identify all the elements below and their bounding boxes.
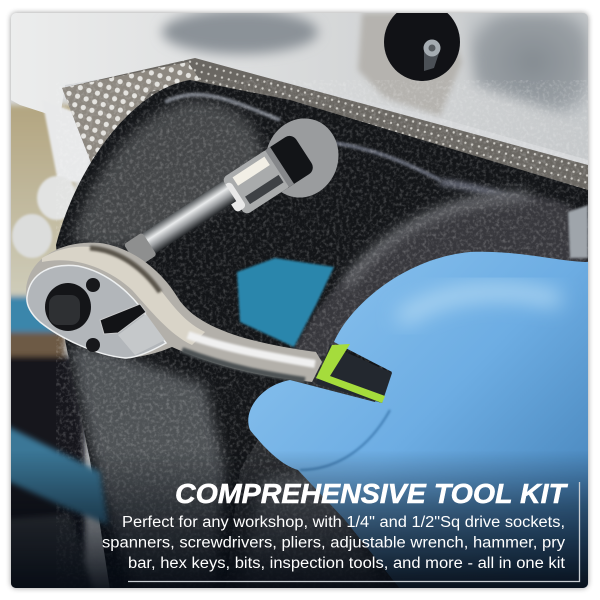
left blurred background (11, 102, 90, 588)
square drive (45, 283, 91, 331)
left white lugs (12, 100, 92, 258)
right bolt (568, 205, 588, 258)
ratchet head and handle (26, 243, 322, 382)
engine head: pale casting (11, 13, 588, 160)
screws (86, 278, 100, 292)
description text: spanners, screwdrivers, pliers, adjustable wrench, hammer, pry (102, 534, 565, 552)
grain texture (56, 80, 588, 590)
corner frame rule (128, 482, 580, 582)
description text (102, 514, 566, 572)
description text: Perfect for any workshop, with 1/4" and 1/2"Sq drive sockets, (122, 514, 565, 531)
direction lever (100, 304, 146, 334)
gloved hand (248, 252, 588, 595)
bottom text scrim (5, 450, 595, 595)
socket washer (267, 118, 338, 198)
description text: bar, hex keys, bits, inspection tools, and more - all in one kit (128, 555, 566, 572)
extension bar (124, 180, 237, 267)
black manifold (56, 80, 588, 590)
handle grip with green trim (316, 344, 392, 403)
heat shield gasket (62, 58, 588, 195)
socket (224, 136, 313, 214)
ratchet plate (27, 265, 166, 358)
background pipe at bottom left (5, 425, 108, 525)
blue opening (237, 258, 334, 347)
title: COMPREHENSIVE TOOL KIT (175, 478, 568, 509)
bolt hole (384, 13, 460, 81)
